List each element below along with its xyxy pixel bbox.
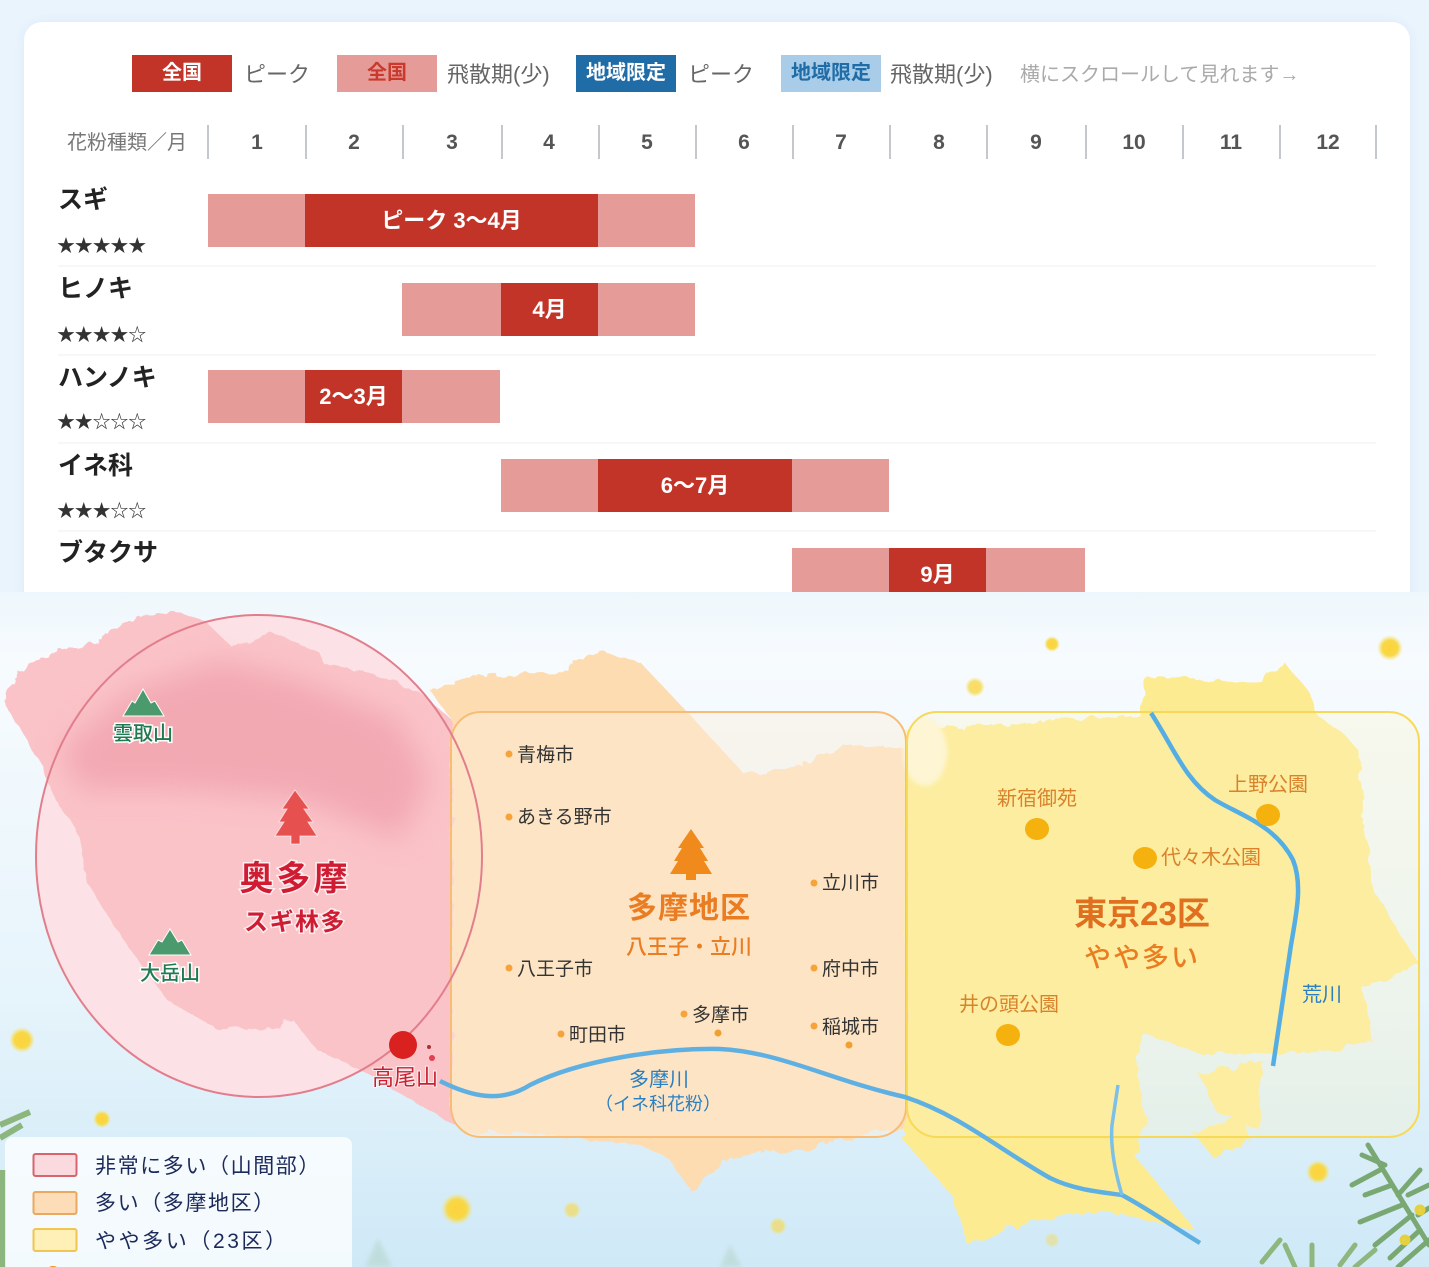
city labels: Tama: 町田市: [569, 1024, 626, 1046]
heading: Tokyo 23 wards: 東京23区: [1074, 895, 1210, 932]
label: Tama river: 多摩川: [629, 1068, 689, 1091]
row: ハンノキ: 2〜3月: [319, 384, 388, 409]
label: Odake: 大岳山: [140, 962, 200, 985]
river: Arakawa: [1151, 713, 1298, 1066]
river: branch: [1112, 1085, 1122, 1195]
map background: [0, 592, 1429, 1267]
month 5: 5: [641, 131, 653, 154]
row: スギ: [57, 186, 695, 256]
city labels: Tama: 青梅市: [517, 744, 574, 766]
icon: cedar tree orange: [670, 829, 712, 880]
icon: cedar tree red: [275, 790, 317, 844]
row: ブタクサ: [58, 539, 1085, 592]
row: スギ: ピーク 3〜4月: [381, 208, 522, 233]
legend panel: やや多い（23区）: [95, 1230, 289, 1253]
row: イネ科: [57, 452, 889, 521]
row: ヒノキ: ヒノキ: [58, 275, 133, 303]
region: Okutama pink land: [5, 610, 455, 1125]
legend panel: 多い（多摩地区）: [95, 1192, 276, 1215]
label: Kumotori: 雲取山: [113, 722, 173, 745]
legend panel: [5, 1137, 352, 1267]
label: Takao: 高尾山: [372, 1065, 438, 1090]
panel: pollen calendar card: [24, 22, 1410, 602]
park: Ueno: 上野公園: [1228, 773, 1308, 796]
zone: Tama rounded outline: [451, 712, 906, 1137]
city labels: Tama: [506, 744, 879, 1048]
zone fill: Okutama ellipse: [36, 615, 482, 1097]
month 2: 2: [348, 131, 360, 154]
row: ヒノキ: ★★★★☆: [57, 325, 146, 345]
foliage: soft trees at bottom: [365, 1238, 742, 1267]
month 7: 7: [835, 131, 847, 154]
legend label: peak: ピーク: [244, 62, 310, 87]
row: イネ科: ★★★☆☆: [57, 501, 146, 521]
month 9: 9: [1030, 131, 1042, 154]
row: ブタクサ: 9月: [920, 562, 955, 587]
zone: 23 wards rounded outline: [907, 712, 1419, 1137]
subheading: Hachioji Tachikawa: 八王子・立川: [626, 936, 752, 959]
month 10: 10: [1122, 131, 1146, 154]
legend: nationwide low season: [337, 55, 437, 92]
region: pale corner: [903, 718, 947, 786]
legend label: regional low season: 飛散期(少): [890, 62, 993, 87]
legend: regional peak: [576, 55, 676, 92]
row: ヒノキ: [57, 275, 695, 345]
marker: Takao: [389, 1031, 435, 1061]
legend label: regional peak: ピーク: [688, 62, 754, 87]
foliage: bottom right evergreen branch: [1262, 1145, 1429, 1267]
row: ハンノキ: ハンノキ: [58, 364, 157, 392]
legend: nationwide peak: 全国: [162, 62, 202, 84]
city labels: Tama: あきる野市: [517, 806, 612, 828]
month 6: 6: [738, 131, 750, 154]
icon: mountain Daigaku: [149, 929, 191, 955]
legend: nationwide peak: [132, 55, 232, 92]
zone: Okutama ellipse outline: [36, 615, 482, 1097]
park: Ueno: [1228, 773, 1308, 826]
scroll hint: 横にスクロールして見れます→: [1020, 64, 1299, 86]
city labels: Tama: 多摩市: [692, 1004, 749, 1026]
month 3: 3: [446, 131, 458, 154]
region: yellow islands: [1195, 1060, 1262, 1160]
row: スギ: スギ: [58, 186, 108, 214]
label: Arakawa: 荒川: [1302, 983, 1342, 1006]
subheading: somewhat many: やや多い: [1084, 943, 1200, 973]
legend: regional peak: 地域限定: [586, 62, 666, 84]
subheading: many cedar forests: スギ林多: [244, 909, 346, 936]
river: Tama river: [440, 1049, 1200, 1243]
park: Inokashira: [959, 993, 1059, 1046]
row: スギ: ★★★★★: [57, 236, 146, 256]
pollen dots: [9, 635, 1403, 1248]
label: grass pollen: （イネ科花粉）: [595, 1094, 721, 1114]
region: Tama orange land: [430, 650, 906, 1192]
row: イネ科: イネ科: [58, 452, 133, 480]
legend: regional low season: [781, 55, 881, 92]
heading: Okutama: 奥多摩: [240, 860, 350, 898]
legend: nationwide low season: 全国: [367, 62, 407, 84]
city labels: Tama: 稲城市: [822, 1016, 879, 1038]
legend label: low season: 飛散期(少): [447, 62, 550, 87]
park: Inokashira: 井の頭公園: [959, 993, 1059, 1016]
city labels: Tama: 立川市: [822, 872, 879, 894]
month 11: 11: [1220, 131, 1242, 154]
legend: regional low season: 地域限定: [791, 62, 871, 84]
row: ブタクサ: ブタクサ: [58, 539, 158, 567]
city labels: Tama: 府中市: [822, 958, 879, 980]
month 4: 4: [543, 131, 555, 154]
row: ハンノキ: ★★☆☆☆: [57, 412, 146, 432]
heading: Tama district: 多摩地区: [627, 892, 751, 925]
park: Shinjuku Gyoen: 新宿御苑: [997, 787, 1077, 810]
region: 23 wards yellow land: [900, 660, 1420, 1244]
row: ヒノキ: 4月: [532, 297, 567, 322]
month 8: 8: [933, 131, 945, 154]
city labels: Tama: 八王子市: [517, 958, 593, 980]
chart header: pollen type and month: 花粉種類／月: [67, 132, 187, 154]
month 1: 1: [251, 131, 263, 154]
park: Yoyogi: 代々木公園: [1161, 846, 1261, 869]
icon: mountain Kumotori: [123, 689, 164, 716]
row: ハンノキ: [57, 364, 500, 432]
park: Shinjuku Gyoen: [997, 787, 1077, 840]
foliage: left branch: [0, 1112, 30, 1267]
month 12: 12: [1316, 131, 1340, 154]
legend panel: 非常に多い（山間部）: [95, 1155, 321, 1178]
row: イネ科: 6〜7月: [661, 473, 729, 498]
